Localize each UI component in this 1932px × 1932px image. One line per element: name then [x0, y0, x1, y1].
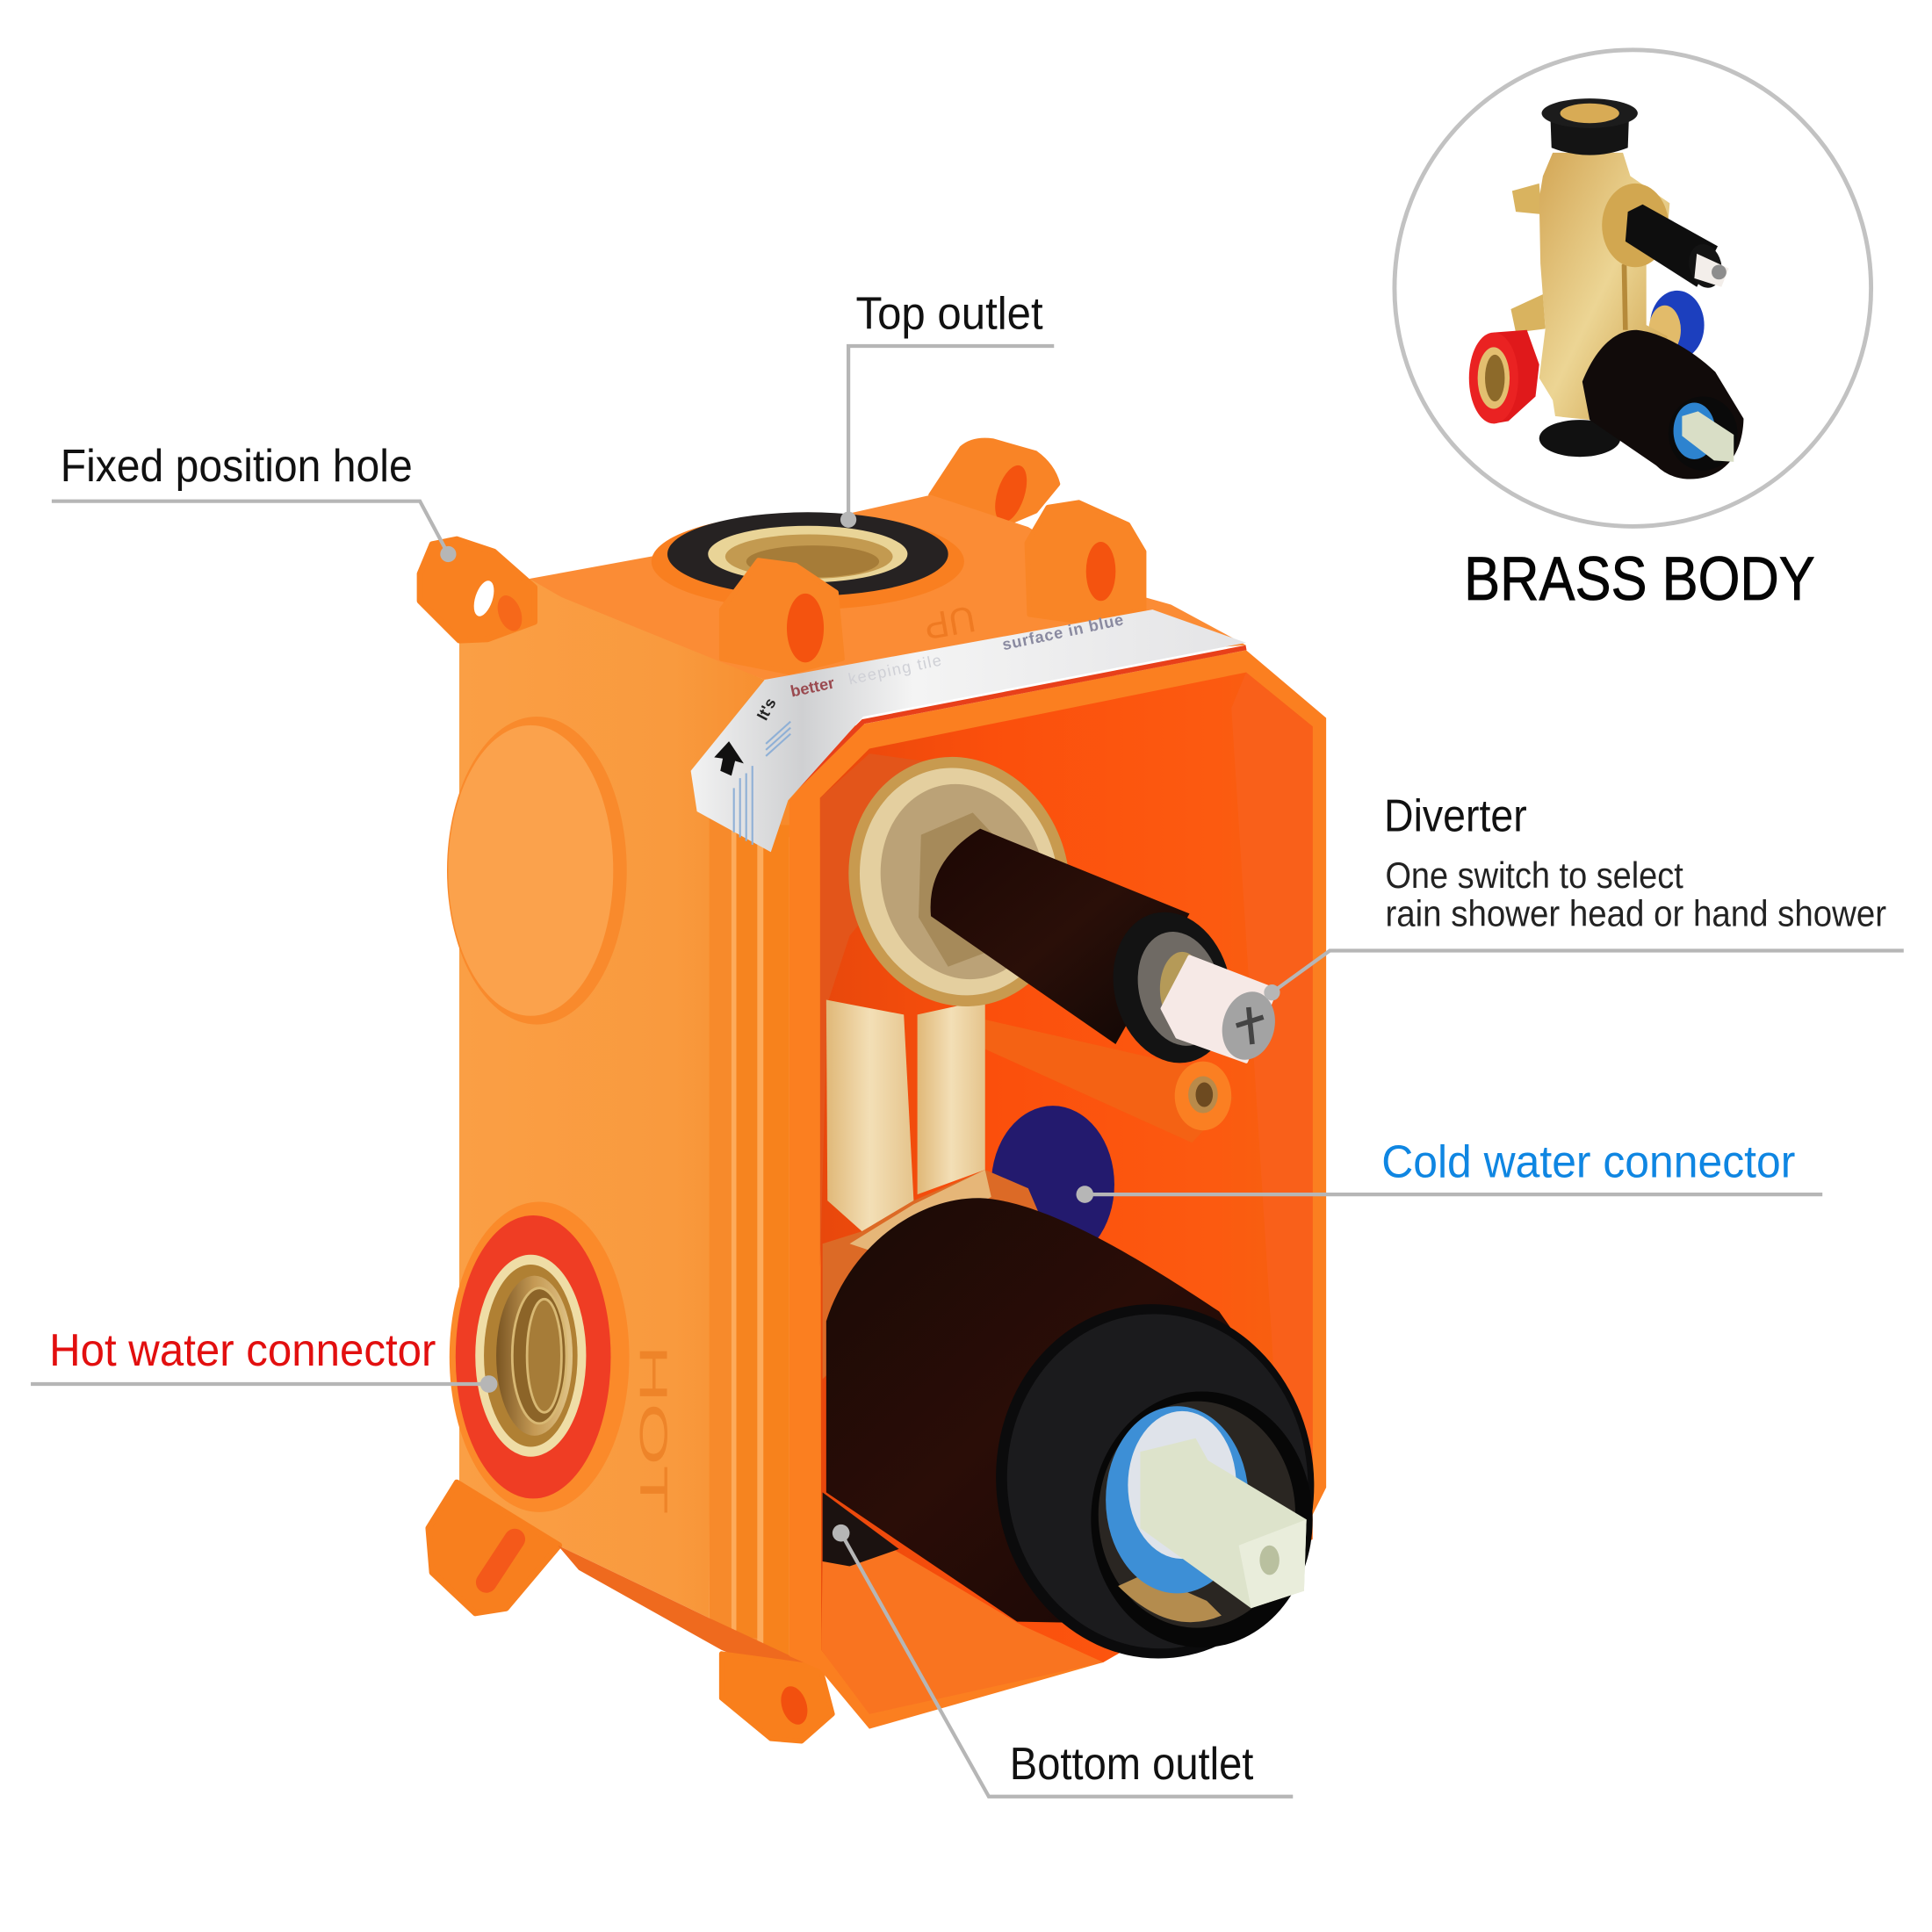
leader: Cold water connector — [1076, 1186, 1822, 1203]
tape text: surface in blue: surface in blue — [1000, 610, 1126, 653]
text: diverter description: One switch to select — [1385, 854, 1683, 896]
inset bottom black collar — [1539, 420, 1620, 457]
diverter assembly — [823, 733, 1282, 1076]
inset lugs — [1510, 184, 1546, 333]
hot water port — [450, 1202, 630, 1512]
front top mounting ear — [722, 560, 842, 673]
brass valve casting — [820, 753, 1047, 1379]
red gasket line — [777, 648, 1246, 806]
lower left mounting ear — [429, 1482, 559, 1613]
bottom edge shadow — [558, 1546, 820, 1677]
heading: Fixed position hole: Fixed position hole — [61, 440, 413, 491]
cartridge cap — [978, 1288, 1331, 1675]
inset red connector — [1469, 330, 1539, 423]
main product: orange wall box — [420, 440, 1331, 1741]
rear mounting ear — [931, 440, 1057, 532]
heading: BRASS BODY: BRASS BODY — [1464, 544, 1815, 613]
inset blue connector — [1649, 291, 1705, 359]
cartridge stem — [1140, 1438, 1307, 1608]
HOT embossed mark: HOT — [631, 1344, 676, 1515]
inset casting groove — [1622, 261, 1628, 330]
inner cavity — [820, 673, 1313, 1712]
inset diverter — [1602, 184, 1729, 292]
heading: Hot water connector: Hot water connector — [49, 1324, 436, 1375]
small orange boss — [985, 1020, 1234, 1143]
protective tape — [691, 609, 1246, 852]
heading: Bottom outlet: Bottom outlet — [1010, 1738, 1254, 1789]
inset ring — [1395, 50, 1871, 526]
heading: Cold water connector: Cold water connector — [1381, 1135, 1795, 1186]
spindle end ring — [1098, 899, 1247, 1076]
top water port — [652, 512, 964, 609]
heading: Top outlet: Top outlet — [856, 287, 1043, 338]
brass crescent — [1118, 1574, 1222, 1622]
leader: Bottom outlet — [833, 1525, 1293, 1797]
bottom mounting ear — [722, 1654, 833, 1741]
text: diverter description: rain shower head or hand shower — [1385, 892, 1886, 934]
blue cartridge ring — [1106, 1406, 1249, 1593]
leader: Hot water connector — [31, 1375, 497, 1393]
screw — [1215, 986, 1282, 1065]
leader: Diverter — [1264, 950, 1904, 1000]
white stem — [1163, 956, 1276, 1062]
tape text: better: better — [789, 674, 836, 701]
leader: Top outlet — [840, 346, 1054, 528]
left side face — [459, 579, 765, 1618]
tape text: It's: It's — [753, 696, 780, 724]
right top mounting ear — [1027, 502, 1144, 623]
heading: Diverter: Diverter — [1384, 789, 1527, 840]
inset black valve body — [1582, 330, 1743, 479]
leader: Fixed position hole — [52, 501, 457, 562]
inner bottom wall — [821, 1546, 1103, 1714]
tape arrow — [714, 741, 744, 775]
knockout cover disc — [447, 717, 627, 1025]
top face — [530, 495, 1246, 680]
UP embossed mark: UP — [921, 598, 978, 647]
text: diverter description — [1385, 854, 1886, 934]
upper left mounting ear — [420, 539, 535, 640]
black spindle — [931, 829, 1189, 1044]
tape blue lines — [734, 722, 790, 845]
ribbed corner — [710, 714, 862, 1668]
bottom outlet seat — [823, 1492, 899, 1567]
lower black valve body — [826, 1198, 1293, 1626]
inner right wall ribs — [1231, 673, 1313, 1478]
flange — [823, 733, 1096, 1030]
tape text: keeping tile: keeping tile — [847, 651, 944, 688]
inset brass casting — [1539, 153, 1669, 420]
inset: brass body circle — [1395, 50, 1871, 526]
front frame — [789, 650, 1326, 1729]
inset top black collar — [1542, 98, 1638, 155]
cold water blue seal — [991, 1106, 1114, 1264]
inset cartridge — [1669, 396, 1737, 471]
